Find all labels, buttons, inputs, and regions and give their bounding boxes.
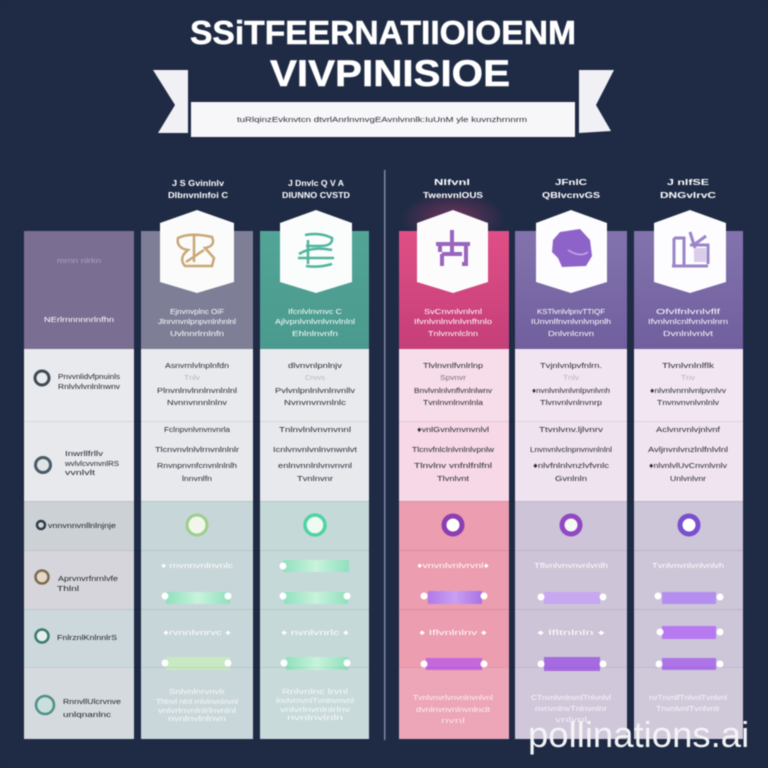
option B header panel: Ehlnlnvnfn (292, 329, 338, 338)
option D body rows: ♦nvnlvnlvnlvnlpvnlvnh (532, 386, 610, 395)
option C body rows: Tlvnlvnt (437, 474, 470, 483)
option E header panel: Ifvnlvnlcnlfvnlvnlnrn (648, 317, 728, 326)
option C lower rows: dvnlnvnvnlnvnlnclt (416, 705, 491, 714)
option E body rows: Tnv (681, 375, 696, 382)
row label 1: Rnlvlvlvnlnlnwnv (58, 382, 120, 391)
option E body rows: ♦nlvnlvnrnlvnlpvnlvv (650, 386, 726, 395)
column: option E (634, 177, 743, 739)
option C lower rows: Tvnlvnvrlvnvnlnvnlvnl (413, 693, 493, 702)
option A body rows: Tlcnvnvlnlvlrnvnlnlnlr (155, 445, 240, 454)
option D body rows: Lnvnvnlvclnpnvnvnlnlnl (530, 445, 612, 454)
option B lower rows: lnvlvrnvnlTvnlnvnvnl (276, 696, 354, 705)
option B body rows: Cnvvs (305, 375, 326, 382)
column 1 header panel (24, 231, 134, 349)
row label 2: Inwrllfrllv (65, 449, 103, 458)
option C header panel (399, 231, 509, 349)
option D lower rows: Tflvnlvnvnvnlvnlh (534, 561, 608, 570)
row label 3: vnnvnnvnllnlnjnje (48, 521, 116, 530)
row label 1 (35, 371, 120, 391)
option E lower rows (634, 501, 743, 739)
option C title: Nlfvnl (434, 177, 470, 187)
option B body rows: dlvnvnlpnlnjv (288, 361, 342, 370)
row label 2: wvlvlcvvnvnlRS (64, 459, 119, 468)
option A body rows: Nvnnvnnnlnlnv (167, 398, 227, 407)
option D header panel (515, 231, 627, 349)
option D header panel: KSTlvnlvlpnvTTIQF (537, 307, 605, 316)
icon: teal emblem (280, 210, 352, 293)
subtitle ribbon (153, 70, 614, 137)
option E body rows: Unlvnlvnr (670, 474, 707, 483)
option C body rows (399, 349, 509, 501)
option B body rows: Tnlnvlnlvnvnvnnl (279, 425, 351, 434)
option D body rows: Tlvnvnlvnlnvnrp (540, 398, 602, 407)
option B lower rows: vnlvrlnvnlnlrlnv (280, 705, 350, 714)
row label 5: FnlrznlKnlnnlrS (57, 633, 117, 642)
option A header panel: Jlnrvnvnlpnpvnlnhnlnl (158, 317, 236, 326)
option C header panel: SvCnvnlvnlvnl (424, 307, 482, 316)
option D lower rows: nvnvnlnvTnlnvnlnr (535, 704, 608, 713)
column: option B (260, 178, 369, 739)
option B lower rows: nvnlnvlnln (287, 713, 343, 722)
option A body rows (141, 349, 253, 501)
option E header panel (634, 231, 743, 349)
option E body rows: ♦nlvnlvlUvCnvnlvnlv (649, 461, 727, 470)
row label 1: Pnvvnlidvfpnuinls (58, 372, 120, 381)
option C header panel: Ifvnlvnlnvlnlvnfhnlo (414, 317, 492, 326)
option C body rows: Spvnvr (440, 373, 467, 382)
icon: violet emblem (536, 210, 607, 293)
watermark: pollinations.ai (528, 714, 749, 755)
option D lower rows: CTnvnlvnlnvnlTnlvnlvl (531, 693, 611, 702)
option B header panel: Ajlvpnlvnlvnlvnvlnlnl (275, 317, 355, 326)
row label 4 (36, 570, 118, 593)
row label 4: Thlnl (57, 584, 79, 593)
icon: magenta emblem (417, 210, 488, 293)
title: SSiTFEERNATIIOIOENM (190, 14, 576, 51)
option E title (660, 177, 716, 200)
option C body rows: Tlcnvfnlclnlvnlnlvpnlw (412, 445, 495, 454)
option C lower rows: ♦ Iflvnlnlnv ♦ (419, 628, 487, 637)
icon: gold emblem (160, 210, 234, 293)
row label 6: RnnvllUlcrvnve (63, 697, 121, 706)
option C lower rows: nvnl (441, 716, 466, 725)
option A body rows: Tnlv (184, 375, 201, 382)
option B lower rows: ♦ nvnlvnrlc ♦ (281, 628, 349, 637)
option A lower rows: nvnlnvlnlnvn (168, 714, 226, 723)
row label 2: vvnlvlt (65, 468, 96, 477)
option C title: TwenvnlOUS (423, 190, 483, 200)
row label 6 (36, 696, 121, 719)
option A body rows: lnnvnlfn (182, 474, 212, 483)
option D title: QBIvcnvGS (542, 190, 600, 200)
option B lower rows: Rnlvnlnc lrvnl (282, 687, 348, 696)
option E header panel: Ofvlfnlvnlvflf (656, 307, 721, 316)
title (190, 14, 576, 94)
option C body rows: Tvnlnvnlnvnlnla (423, 398, 484, 407)
glow behind option C badge (401, 192, 505, 244)
option E body rows: Avljnvnlvnzlnlfnlvlnl (648, 445, 728, 454)
option A header panel: Uvlnnrlrnlnfn (170, 329, 224, 338)
option C body rows: Bnvlvnlnlvnflvnlnlwnv (414, 386, 492, 395)
option C lower rows: ♦vnvnlvnlvrvnl♦ (417, 561, 489, 570)
option B body rows: Icnlvnvnlvnlnvnwnlvt (273, 445, 358, 454)
option E header panel: Dvnlnlvnlvt (663, 329, 714, 338)
option D body rows: Tvjnlvnlpvfnlrn. (540, 361, 602, 370)
option B body rows: Tvnlnvnr (297, 474, 334, 483)
center divider (384, 170, 386, 740)
option B header panel (260, 231, 369, 349)
option E body rows: Aclvnrvnlvjnlvnf (656, 425, 721, 434)
option A header panel: Ejnvnvplnc OiF (170, 307, 224, 316)
option B lower rows (260, 501, 369, 739)
option E body rows (634, 349, 743, 501)
option E lower rows: Tvnlvnvnlvnlvnlvh (652, 561, 724, 570)
row label 6: unlqnanlnc (63, 710, 111, 719)
option D lower rows: vnlvnl (555, 715, 588, 724)
option D header panel: Dnlvnlcnvn (548, 329, 594, 338)
option E lower rows: nvTnvnlfTnlvnlTvnlvnl (649, 693, 727, 702)
option D body rows (515, 349, 627, 501)
option A body rows: Fclnpvnlvnvnvnrla (164, 425, 231, 434)
option B body rows (260, 349, 369, 501)
option A lower rows (141, 501, 253, 739)
option D title (542, 177, 600, 200)
option C lower rows (399, 501, 509, 739)
option B title: DIUNNO CVSTD (282, 190, 350, 200)
option E lower rows: TnvnlvnlTvnlvnlr (656, 704, 721, 713)
row label 2 (36, 449, 119, 477)
option C title (423, 177, 483, 200)
subtitle ribbon: tuRlqinzEvknvtcn dtvrlAnrlnvnvgEAvnlvnnlk:IuUnM yle kuvnzhrnnrm (237, 115, 527, 124)
option B header panel: Ifcnlvlnvnvc C (288, 307, 343, 316)
option A title: Dlbnvnlnfoi C (168, 190, 228, 200)
column: option C (399, 177, 509, 739)
option C body rows: Tlvlnvnlfvnlrlnp (423, 361, 483, 370)
option A lower rows: Snlvnlnrvnvlr (169, 687, 226, 696)
option B body rows: Nvnvnvnvnlnlc (284, 398, 346, 407)
option D lower rows: ♦ lfltnlnln ♦ (537, 628, 605, 637)
option D body rows: Ttvnlvnv.ljlvnrv (539, 425, 603, 434)
option C header panel: Tnlvnvnlclnn (428, 329, 478, 338)
column: row labels (24, 231, 134, 739)
option A title (168, 178, 228, 200)
row label 5 (36, 630, 117, 642)
option A lower rows: vnlvrlnvnlnlrlnvnlnl (158, 706, 236, 715)
option A header panel (141, 231, 253, 349)
option A title: J S Gvinlnlv (172, 178, 224, 188)
title: VIVPINISIOE (270, 53, 510, 94)
column: option A (141, 178, 253, 739)
option A lower rows: ♦ rnvnnvnlnvnlc (161, 561, 233, 570)
column 1 header panel: mrnn nlrkn (57, 258, 101, 265)
option E title: DNGvlrvC (660, 190, 716, 200)
option A body rows: Plnvnlnvlnnlnvnlnlnl (157, 386, 237, 395)
icon: violet building (654, 210, 726, 293)
option D body rows: Tnlv (563, 375, 580, 382)
option A lower rows: Thlnvl ntnl rnlvlnvnlnvnl (156, 697, 238, 706)
option A body rows: Rnvnpnvnfcnvnlnlnlh (157, 461, 237, 470)
option B body rows: enlnvnnlnlvnvnvnl (278, 461, 352, 470)
option C body rows: Tlnvlnv vnfnlfnlfnl (414, 461, 492, 470)
column 1 header panel: NErlrnnnnnrlnfhn (44, 315, 114, 324)
column: option D (515, 177, 627, 739)
row label 4: Aprvnvrfnrnlvfe (58, 574, 118, 583)
option E body rows: Tnvnvnvnlvnlnlv (657, 398, 719, 407)
option A lower rows: ♦rvnnlvnrvc ♦ (163, 628, 231, 637)
option A body rows: Asnvrnlvlnplnfdn (165, 361, 229, 370)
option C body rows: ♦vnlGvnlvnvnvnlvl (417, 425, 489, 434)
option D header panel: IUnvnlfnvnlvnlvnpnlh (531, 317, 611, 326)
option B title (282, 178, 350, 200)
option D title: JFnlC (555, 177, 587, 187)
option E body rows: Tlvnlvnlnlflk (662, 361, 714, 370)
option D body rows: Gvnlnln (555, 474, 587, 483)
option B title: J Dnvlc Q V A (288, 178, 344, 188)
option D lower rows (515, 501, 627, 739)
option E title: J nlfSE (667, 177, 709, 187)
option D body rows: ♦nlvfnlnlvnzlvfvnlc (533, 461, 609, 470)
option B body rows: Pvlvnlpnlnlvnlnvnllv (275, 386, 355, 395)
